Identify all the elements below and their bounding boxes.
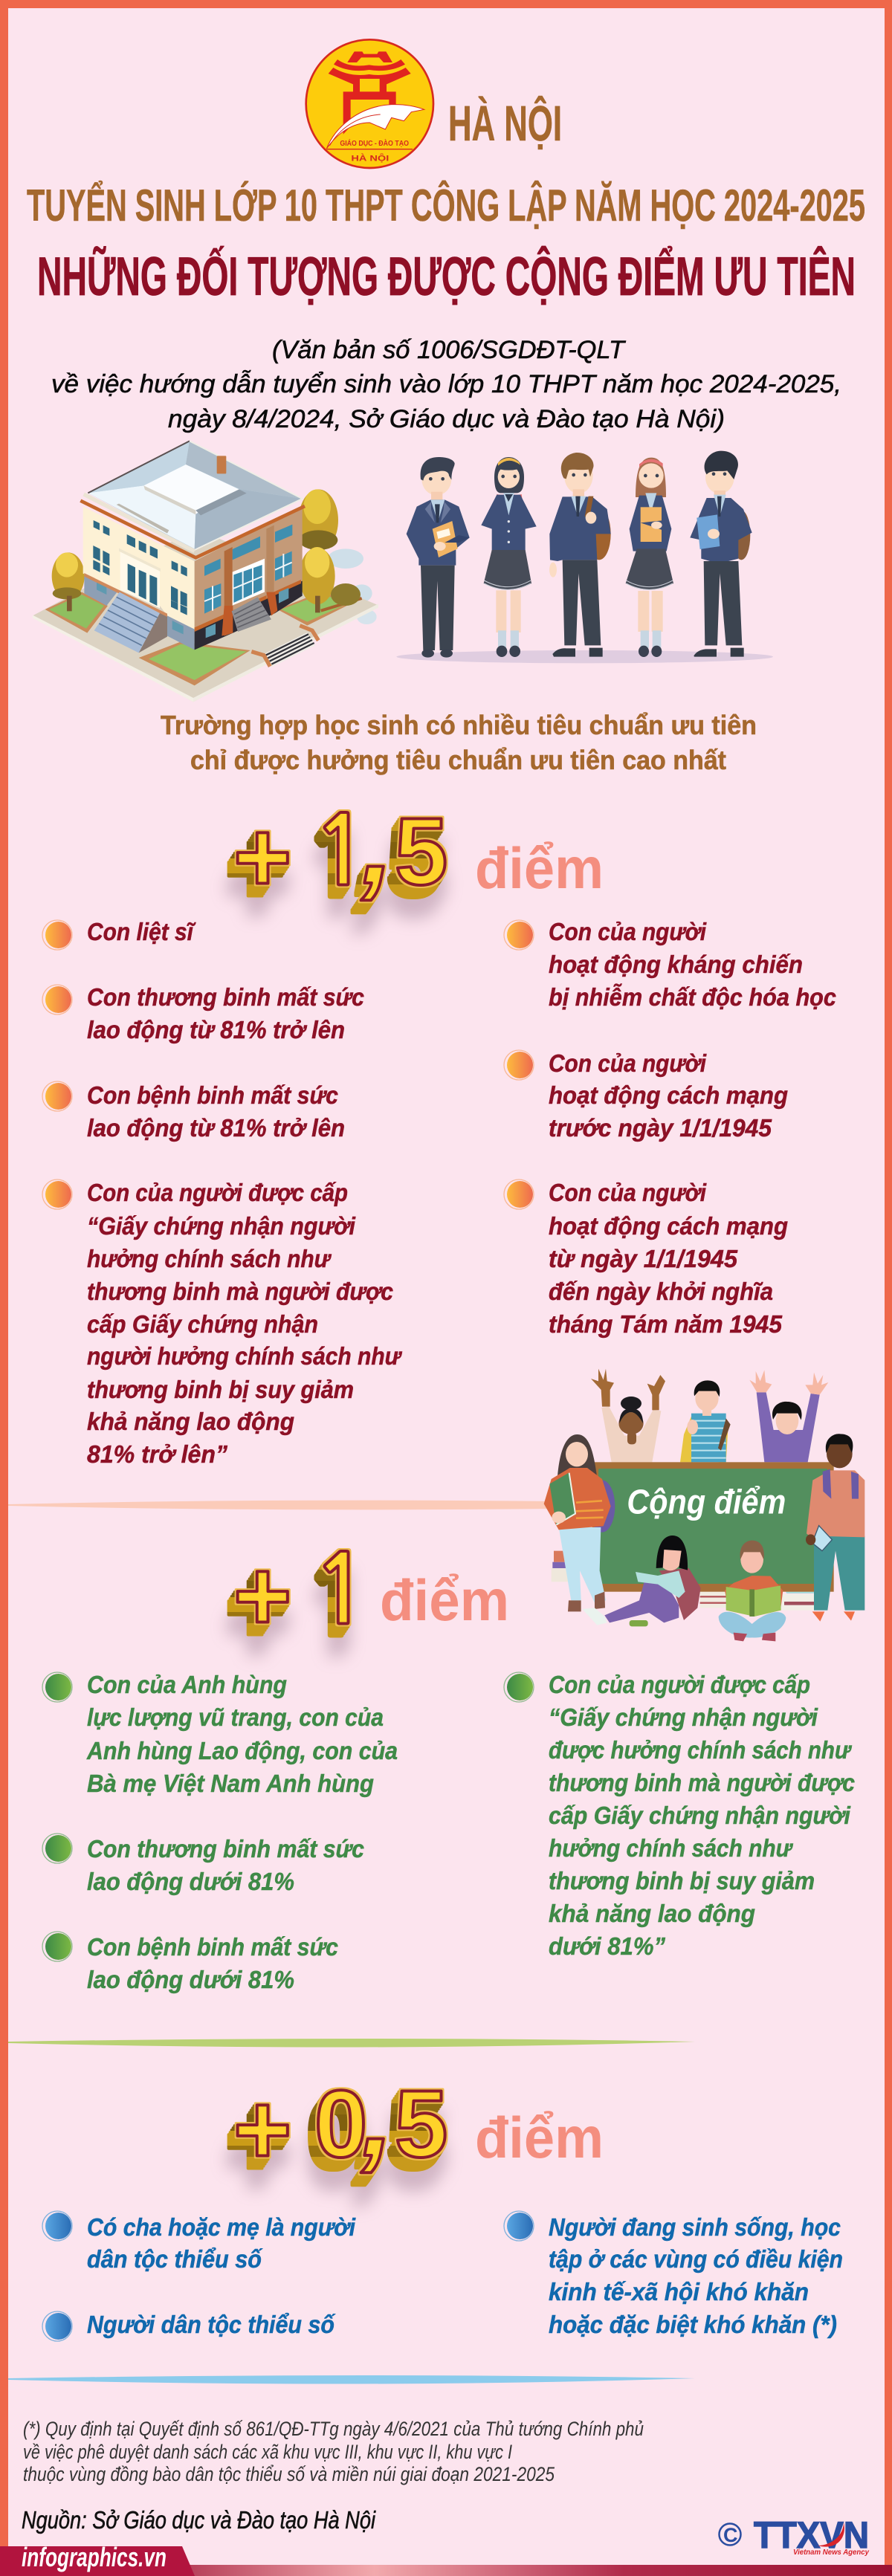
list: +0,5 right column: kinh tế-xã hội khó khăn <box>549 2278 809 2305</box>
board label: Cộng điểm <box>627 1483 786 1521</box>
right stairs <box>232 597 271 632</box>
list: +1 right column: hưởng chính sách như <box>549 1834 793 1862</box>
logo: TTXVN: TTXVN <box>754 2514 869 2556</box>
list: +1,5 left column: hưởng chính sách như <box>87 1245 332 1272</box>
list: +0,5 left column: Người dân tộc thiểu số <box>87 2311 336 2338</box>
logo: Sở Giáo dục Đào tạo Hà Nội: GIÁO DỤC - ĐÀO TẠO <box>340 138 409 148</box>
unit: điểm <box>380 1567 509 1633</box>
list: +1 left column: Con của Anh hùng <box>87 1671 287 1698</box>
footnote <box>23 2418 644 2485</box>
list: +1,5 right column: bị nhiễm chất độc hóa học <box>549 983 836 1011</box>
heading: +1,5 điểm <box>233 782 604 913</box>
list: +1,5 right column: từ ngày 1/1/1945 <box>549 1245 738 1272</box>
number +1: + <box>233 1541 291 1651</box>
bullet <box>504 1672 534 1702</box>
windows right wall <box>204 525 292 614</box>
illustration: five students in uniform <box>396 451 773 663</box>
list: +1,5 left column: lao động từ 81% trở lên <box>87 1114 345 1142</box>
footer band <box>0 2565 892 2576</box>
list: +1 right column: khả năng lao động <box>549 1900 755 1927</box>
note on highest priority <box>161 710 757 775</box>
bullet <box>504 2211 534 2241</box>
list: +1 right column: dưới 81%” <box>549 1932 665 1960</box>
list: +1,5 right column: hoạt động cách mạng <box>549 1212 788 1240</box>
bullet <box>504 1179 534 1209</box>
bullet <box>42 2311 72 2341</box>
bullet <box>42 920 72 950</box>
list: +1,5 right column: Con của người <box>549 1179 707 1206</box>
list: +1,5 left column: thương binh mà người được <box>87 1278 393 1305</box>
list: +1 right column: “Giấy chứng nhận người <box>549 1703 818 1731</box>
list: +1,5 left column: 81% trở lên” <box>87 1440 227 1468</box>
footnote: thuộc vùng đồng bào dân tộc thiểu số và miền núi giai đoạn 2021-2025 <box>23 2463 555 2485</box>
bullet <box>42 1081 72 1111</box>
list: +1,5 right column: hoạt động kháng chiến <box>549 951 803 978</box>
left stairs <box>94 592 160 653</box>
legal reference text: về việc hướng dẫn tuyển sinh vào lớp 10 THPT năm học 2024-2025, <box>51 370 841 398</box>
number +1,5: , <box>361 782 393 907</box>
bullet <box>504 920 534 950</box>
heading: +0,5 điểm <box>233 2054 604 2185</box>
logo: Sở Giáo dục Đào tạo Hà Nội <box>306 39 433 168</box>
bullet <box>504 1050 534 1080</box>
book stacks <box>552 1551 815 1611</box>
heading: +1 điểm <box>233 1541 509 1651</box>
unit: điểm <box>475 2105 604 2170</box>
legal reference text: (Văn bản số 1006/SGDĐT-QLT <box>272 336 626 364</box>
list: +0,5 right column <box>504 2211 843 2338</box>
list: +1 left column: Anh hùng Lao động, con của <box>86 1737 398 1764</box>
ground shadow <box>396 650 773 663</box>
reader girl <box>582 1535 701 1626</box>
student 5 <box>690 451 752 657</box>
kid with purple sweater <box>749 1370 828 1462</box>
list: +1,5 left column: Con thương binh mất sức <box>87 983 364 1011</box>
kid with striped shirt <box>680 1380 731 1462</box>
number +1,5: 1 <box>312 805 370 899</box>
list: +1 left column: Con thương binh mất sức <box>87 1835 364 1863</box>
list: +1 left column: lao động dưới 81% <box>87 1868 294 1895</box>
list: +0,5 left column: dân tộc thiểu số <box>87 2245 263 2273</box>
number +0,5: 0 <box>314 2071 367 2178</box>
list: +1 right column: Con của người được cấp <box>549 1671 810 1698</box>
number +0,5: , <box>361 2054 393 2179</box>
list: +1 left column <box>42 1671 398 1993</box>
legal reference text: ngày 8/4/2024, Sở Giáo dục và Đào tạo Hà Nội) <box>168 405 725 433</box>
number +1,5 <box>233 782 447 913</box>
logo: TTXVN: C <box>723 2524 737 2546</box>
legal reference text <box>51 336 841 433</box>
kid with raised brown arms <box>591 1369 665 1462</box>
number +0,5: 5 <box>395 2071 447 2178</box>
list: +1,5 left column: “Giấy chứng nhận người <box>87 1212 356 1240</box>
organisation name: HÀ NỘI <box>448 96 562 152</box>
footer tab: infographics.vn <box>22 2542 167 2572</box>
windows left wall <box>93 520 187 615</box>
illustration: students around blackboard <box>544 1369 864 1641</box>
bullet <box>42 985 72 1014</box>
logo: Sở Giáo dục Đào tạo Hà Nội: HÀ NỘI <box>351 154 389 164</box>
bullet <box>42 2211 72 2241</box>
blackboard <box>592 1462 834 1592</box>
list: +1,5 right column: đến ngày khởi nghĩa <box>549 1278 773 1305</box>
list: +1,5 right column <box>504 918 836 1338</box>
list: +1 left column: Bà mẹ Việt Nam Anh hùng <box>87 1770 374 1797</box>
reader boy <box>719 1541 786 1641</box>
student 4 <box>626 458 673 657</box>
list: +1 left column: Con bệnh binh mất sức <box>87 1933 338 1961</box>
number +1: 1 <box>312 1544 370 1638</box>
bullet <box>42 1179 72 1209</box>
list: +0,5 right column: Người đang sinh sống, học <box>549 2213 841 2241</box>
list: +0,5 left column <box>42 2211 356 2341</box>
student 3 <box>549 453 611 657</box>
number +0,5: + <box>233 2074 291 2185</box>
note on highest priority: Trường hợp học sinh có nhiều tiêu chuẩn ưu tiên <box>161 710 757 740</box>
list: +1,5 right column: hoạt động cách mạng <box>549 1081 788 1109</box>
student 1 <box>407 457 470 658</box>
list: +1,5 right column: tháng Tám năm 1945 <box>549 1310 783 1338</box>
list: +1 right column: thương binh mà người được <box>549 1769 855 1796</box>
footnote: (*) Quy định tại Quyết định số 861/QĐ-TTg ngày 4/6/2021 của Thủ tướng Chính phủ <box>23 2418 644 2440</box>
note on highest priority: chỉ được hưởng tiêu chuẩn ưu tiên cao nhất <box>190 745 726 775</box>
source: Nguồn: Sở Giáo dục và Đào tạo Hà Nội <box>22 2506 376 2534</box>
list: +1,5 left column: người hưởng chính sách như <box>87 1342 402 1370</box>
bullet <box>42 1672 72 1702</box>
list: +1 right column: được hưởng chính sách như <box>549 1736 852 1764</box>
list: +1 left column: lao động dưới 81% <box>87 1966 294 1993</box>
list: +1,5 left column <box>42 918 402 1468</box>
bullet <box>42 1834 72 1863</box>
list: +1 right column: thương binh bị suy giảm <box>549 1867 815 1894</box>
list: +1 left column: lực lượng vũ trang, con của <box>87 1703 384 1731</box>
list: +1 right column: cấp Giấy chứng nhận người <box>549 1802 851 1829</box>
list: +1,5 left column: cấp Giấy chứng nhận <box>87 1310 318 1338</box>
girl with green book <box>544 1434 615 1611</box>
logo: TTXVN: Vietnam News Agency <box>793 2548 870 2557</box>
list: +1,5 right column: trước ngày 1/1/1945 <box>549 1114 772 1142</box>
number +1,5: + <box>233 802 291 913</box>
unit: điểm <box>475 835 604 901</box>
list: +1,5 right column: Con của người <box>549 918 707 945</box>
number +1,5: 5 <box>395 799 447 905</box>
roof <box>88 441 303 550</box>
list: +1,5 right column: Con của người <box>549 1049 707 1077</box>
list: +1,5 left column: khả năng lao động <box>87 1408 294 1435</box>
number +0,5 <box>233 2054 447 2185</box>
illustration: school building <box>33 441 378 702</box>
list: +1 right column <box>504 1671 855 1960</box>
list: +1,5 left column: Con bệnh binh mất sức <box>87 1081 338 1109</box>
list: +1,5 left column: thương binh bị suy giảm <box>87 1376 354 1403</box>
student 2 <box>481 457 537 657</box>
list: +0,5 right column: tập ở các vùng có điều kiện <box>549 2245 843 2273</box>
list: +1,5 left column: Con của người được cấp <box>87 1179 348 1206</box>
footnote: về việc phê duyệt danh sách các xã khu vực III, khu vực II, khu vực I <box>23 2441 512 2463</box>
number +1 <box>233 1541 370 1651</box>
list: +0,5 right column: hoặc đặc biệt khó khăn (*) <box>549 2311 837 2338</box>
list: +1,5 left column: Con liệt sĩ <box>87 918 196 945</box>
list: +1,5 left column: lao động từ 81% trở lên <box>87 1016 345 1043</box>
bullet <box>42 1932 72 1961</box>
list: +0,5 left column: Có cha hoặc mẹ là người <box>87 2213 356 2241</box>
boy on the right <box>806 1434 864 1622</box>
